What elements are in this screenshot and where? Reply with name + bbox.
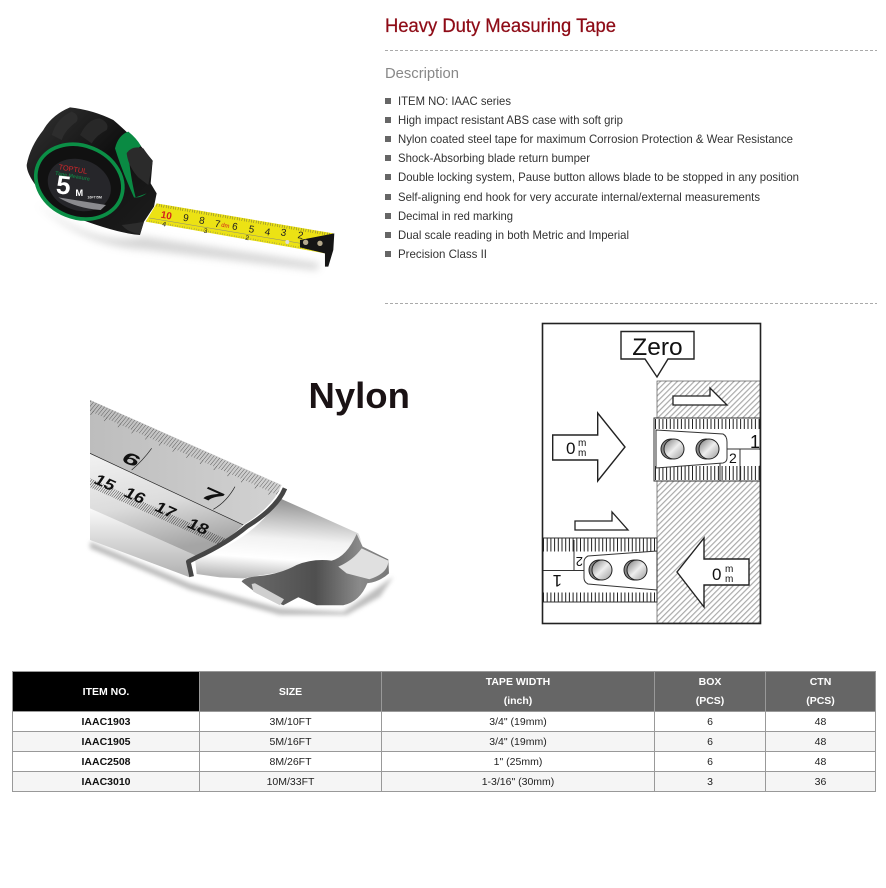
scale numbers: 6: [117, 449, 145, 471]
frame background: [542, 324, 760, 624]
feature list: Self-aligning end hook for very accurate internal/external measurements: [398, 190, 760, 204]
tape top end: 1: [750, 432, 760, 452]
end hook: [285, 233, 334, 267]
yellow tape blade: 5: [248, 224, 256, 236]
tape faces: [90, 400, 282, 525]
specification table: 48: [815, 716, 826, 728]
feature list: Double locking system, Pause button allows blade to be stopped in any position: [398, 170, 799, 184]
dial label: [40, 150, 118, 220]
dial label: TOPTUL: [58, 162, 88, 176]
nylon label: Nylon: [308, 375, 410, 416]
arrow right with 0 mm: m: [578, 438, 586, 449]
specification table: 3M/10FT: [269, 716, 312, 728]
title: Heavy Duty Measuring Tape: [385, 16, 616, 37]
tape top end: 2: [729, 450, 737, 466]
yellow tape blade: 8: [198, 215, 206, 227]
arrow left with 0 mm: [677, 538, 749, 607]
feature list: Dual scale reading in both Metric and Imperial: [398, 228, 629, 242]
specification table: 10M/33FT: [267, 776, 314, 788]
arrow right with 0 mm: [553, 413, 625, 481]
metal blade tip: [195, 498, 389, 605]
specification table: TAPE WIDTH: [486, 676, 550, 688]
specification table: 5M/16FT: [269, 736, 312, 748]
specification table: 3: [707, 776, 713, 788]
feature list: Decimal in red marking: [398, 209, 513, 223]
specification table: 1" (25mm): [494, 756, 542, 768]
yellow tape blade: 10: [160, 210, 173, 223]
tape lower end: 2: [576, 554, 583, 569]
dial label: M: [75, 188, 83, 198]
green side accent: [115, 132, 147, 197]
yellow tape blade: 9: [182, 213, 190, 225]
yellow tape blade: [146, 203, 333, 253]
black case: [24, 107, 157, 235]
white tape side: [90, 508, 197, 577]
specification table: 6: [707, 716, 713, 728]
specification table: 36: [815, 776, 826, 788]
yellow tape blade: 2: [245, 235, 250, 242]
scale numbers: 15: [91, 471, 120, 494]
arrow left with 0 mm: m: [725, 574, 733, 585]
tape lower end: [543, 538, 657, 602]
specification table: [12, 671, 876, 792]
tape lower end: 1: [553, 571, 562, 590]
dial label: Tape Measure: [55, 171, 90, 183]
scale numbers: 17: [151, 498, 180, 521]
arrow left with 0 mm: m: [725, 564, 733, 575]
feature list: High impact resistant ABS case with soft grip: [398, 113, 623, 127]
specification table: 48: [815, 736, 826, 748]
yellow tape blade: 7: [214, 219, 222, 231]
arrow right with 0 mm: 0: [566, 439, 575, 458]
scale numbers: 7: [196, 484, 228, 508]
feature list: Nylon coated steel tape for maximum Corrosion Protection & Wear Resistance: [398, 132, 793, 146]
yellow tape blade: 2: [297, 230, 305, 242]
specification table: IAAC2508: [81, 756, 131, 768]
arrow right with 0 mm: m: [578, 448, 586, 459]
scale numbers: 16: [121, 484, 150, 507]
yellow tape blade: 3: [280, 227, 288, 239]
yellow tape blade: dm: [221, 223, 230, 230]
specification table: IAAC1903: [81, 716, 131, 728]
specification table: 1-3/16" (30mm): [482, 776, 554, 788]
yellow tape blade: 6: [231, 221, 239, 233]
specification table: 8M/26FT: [269, 756, 312, 768]
specification table: 6: [707, 756, 713, 768]
divider bottom: [385, 302, 877, 304]
product photo: tape measure: [24, 107, 334, 270]
specification table: (inch): [504, 694, 532, 706]
specification table: CTN: [810, 676, 831, 688]
specification table: IAAC3010: [81, 776, 131, 788]
specification table: IAAC1905: [81, 736, 131, 748]
yellow tape blade: 4: [162, 221, 167, 229]
feature list: [385, 94, 799, 261]
scale numbers: 18: [184, 515, 213, 538]
specification table: 6: [707, 736, 713, 748]
zero callout: [621, 332, 694, 377]
specification table: 3/4" (19mm): [489, 736, 547, 748]
dial label: 16FT/5M: [87, 196, 102, 200]
yellow tape blade: 4: [264, 227, 272, 239]
specification table: 48: [815, 756, 826, 768]
feature list: ITEM NO: IAAC series: [398, 94, 511, 108]
specification table: (PCS): [696, 694, 724, 706]
lock button: [127, 147, 153, 185]
product artwork and text panel: [26, 18, 877, 624]
curved lip: [242, 534, 389, 605]
specification table: 3/4" (19mm): [489, 716, 547, 728]
small arrow top: [673, 388, 727, 405]
feature list: Precision Class II: [398, 247, 487, 261]
description heading: Description: [385, 65, 459, 82]
hatched wall lower: [657, 481, 760, 623]
hatched wall top: [657, 381, 760, 418]
specification table: ITEM NO.: [83, 686, 129, 698]
specification table: BOX: [699, 676, 721, 688]
dial label: 5: [55, 169, 72, 201]
yellow tape blade: 3: [203, 228, 208, 235]
frame border: [542, 324, 760, 624]
divider top: [385, 50, 877, 52]
arrow left with 0 mm: 0: [712, 565, 721, 584]
specification table: SIZE: [279, 686, 302, 698]
specification table: (PCS): [806, 694, 835, 706]
nylon coated blade illustration: [88, 400, 393, 618]
zero point diagram: [542, 324, 760, 624]
scale numbers: [91, 449, 228, 538]
scale ticks: [90, 400, 280, 544]
green ring: [24, 132, 134, 232]
tape top end: [654, 418, 760, 481]
zero callout: Zero: [632, 334, 683, 361]
feature list: Shock-Absorbing blade return bumper: [398, 151, 590, 165]
small arrow lower: [575, 512, 628, 530]
dark rubber edge: [188, 488, 285, 577]
